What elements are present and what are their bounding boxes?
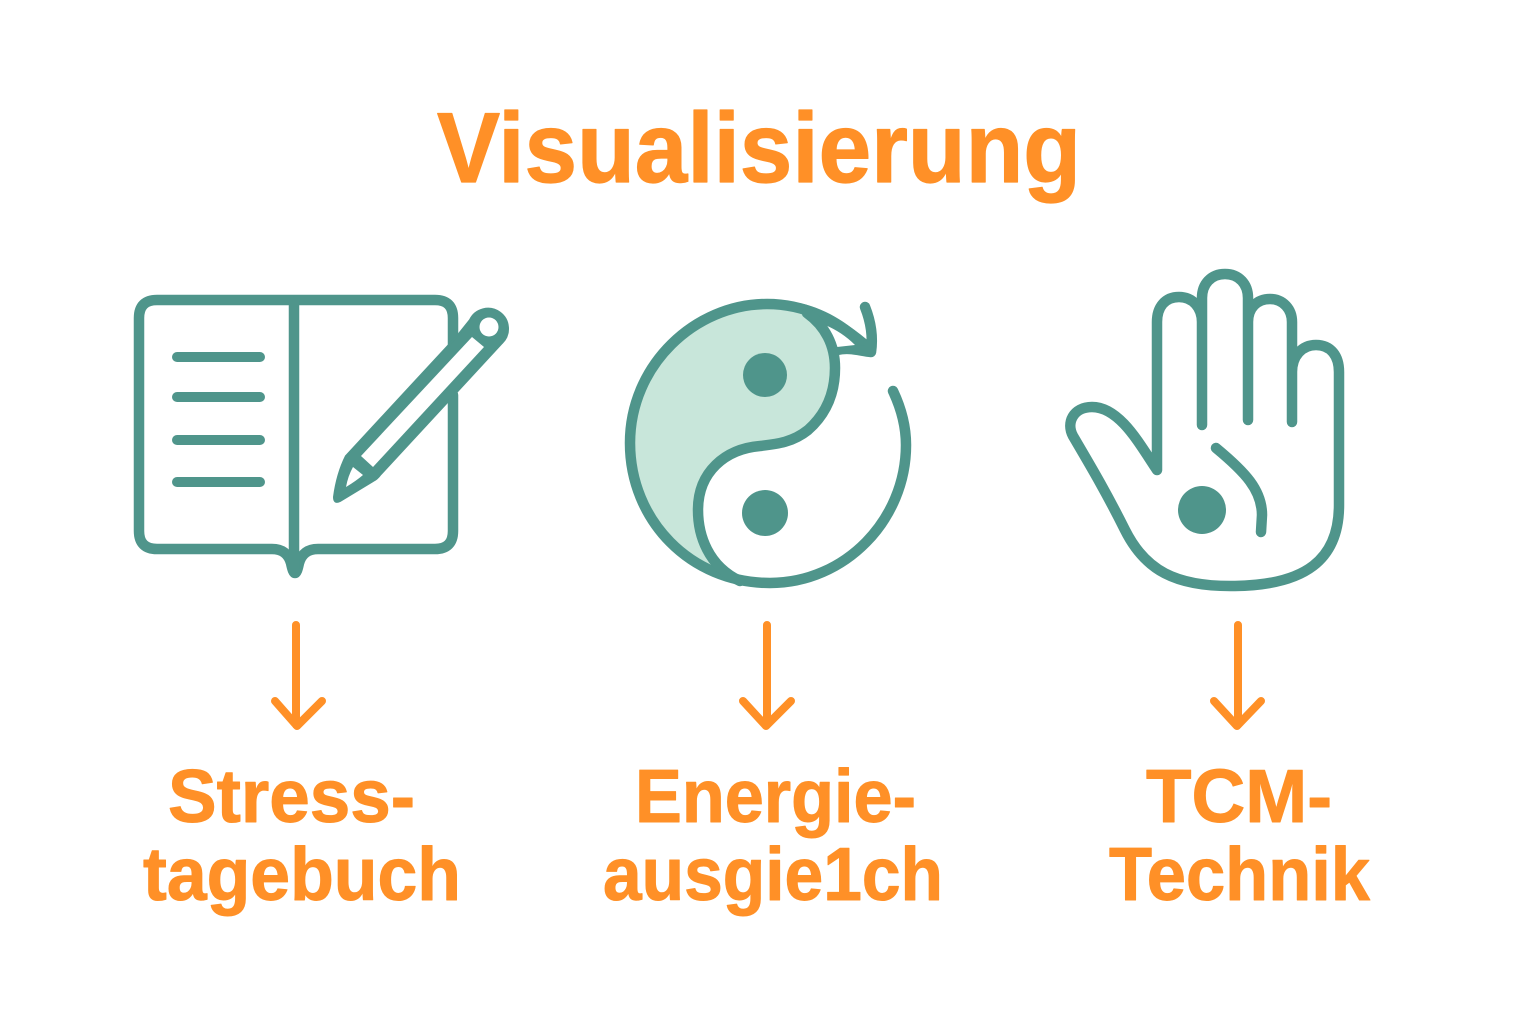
label: TCM-Technik: TCM- (1146, 754, 1332, 838)
label: Energie-ausgleich: ausgie1ch (603, 832, 943, 916)
icon: yin yang with circular arrow (630, 303, 906, 583)
label: Stress-tagebuch: tagebuch (143, 832, 461, 916)
arrow: hand to label (1214, 625, 1261, 726)
ring thickening toward arrow (800, 303, 873, 356)
icon: notebook with pencil (139, 300, 508, 573)
notebook cover (139, 300, 453, 573)
palm line (1216, 448, 1262, 532)
arrow: yin yang to label (743, 625, 791, 726)
label: Energie-ausgleich (603, 754, 943, 916)
hand outline (1070, 274, 1339, 586)
label: TCM-Technik: Technik (1109, 832, 1370, 916)
pencil (334, 309, 508, 502)
label: TCM-Technik (1109, 754, 1370, 916)
arrow head inner gap (825, 325, 855, 347)
title: Visualisierung (437, 92, 1081, 203)
icon: hand with palm point (1070, 274, 1339, 586)
circular arrow ring (630, 304, 906, 583)
arrow: notebook to label (275, 625, 322, 726)
lower dot (742, 490, 788, 536)
notebook spine (289, 302, 299, 568)
label: Stress-tagebuch: Stress- (168, 754, 415, 838)
S curve divider (698, 313, 835, 581)
upper dot (743, 353, 787, 397)
label: Energie-ausgleich: Energie- (635, 754, 916, 838)
mint half (630, 306, 835, 567)
palm dot (1178, 486, 1226, 534)
label: Stress-tagebuch (143, 754, 461, 916)
arrow head (837, 307, 872, 352)
notebook text lines (177, 357, 260, 482)
